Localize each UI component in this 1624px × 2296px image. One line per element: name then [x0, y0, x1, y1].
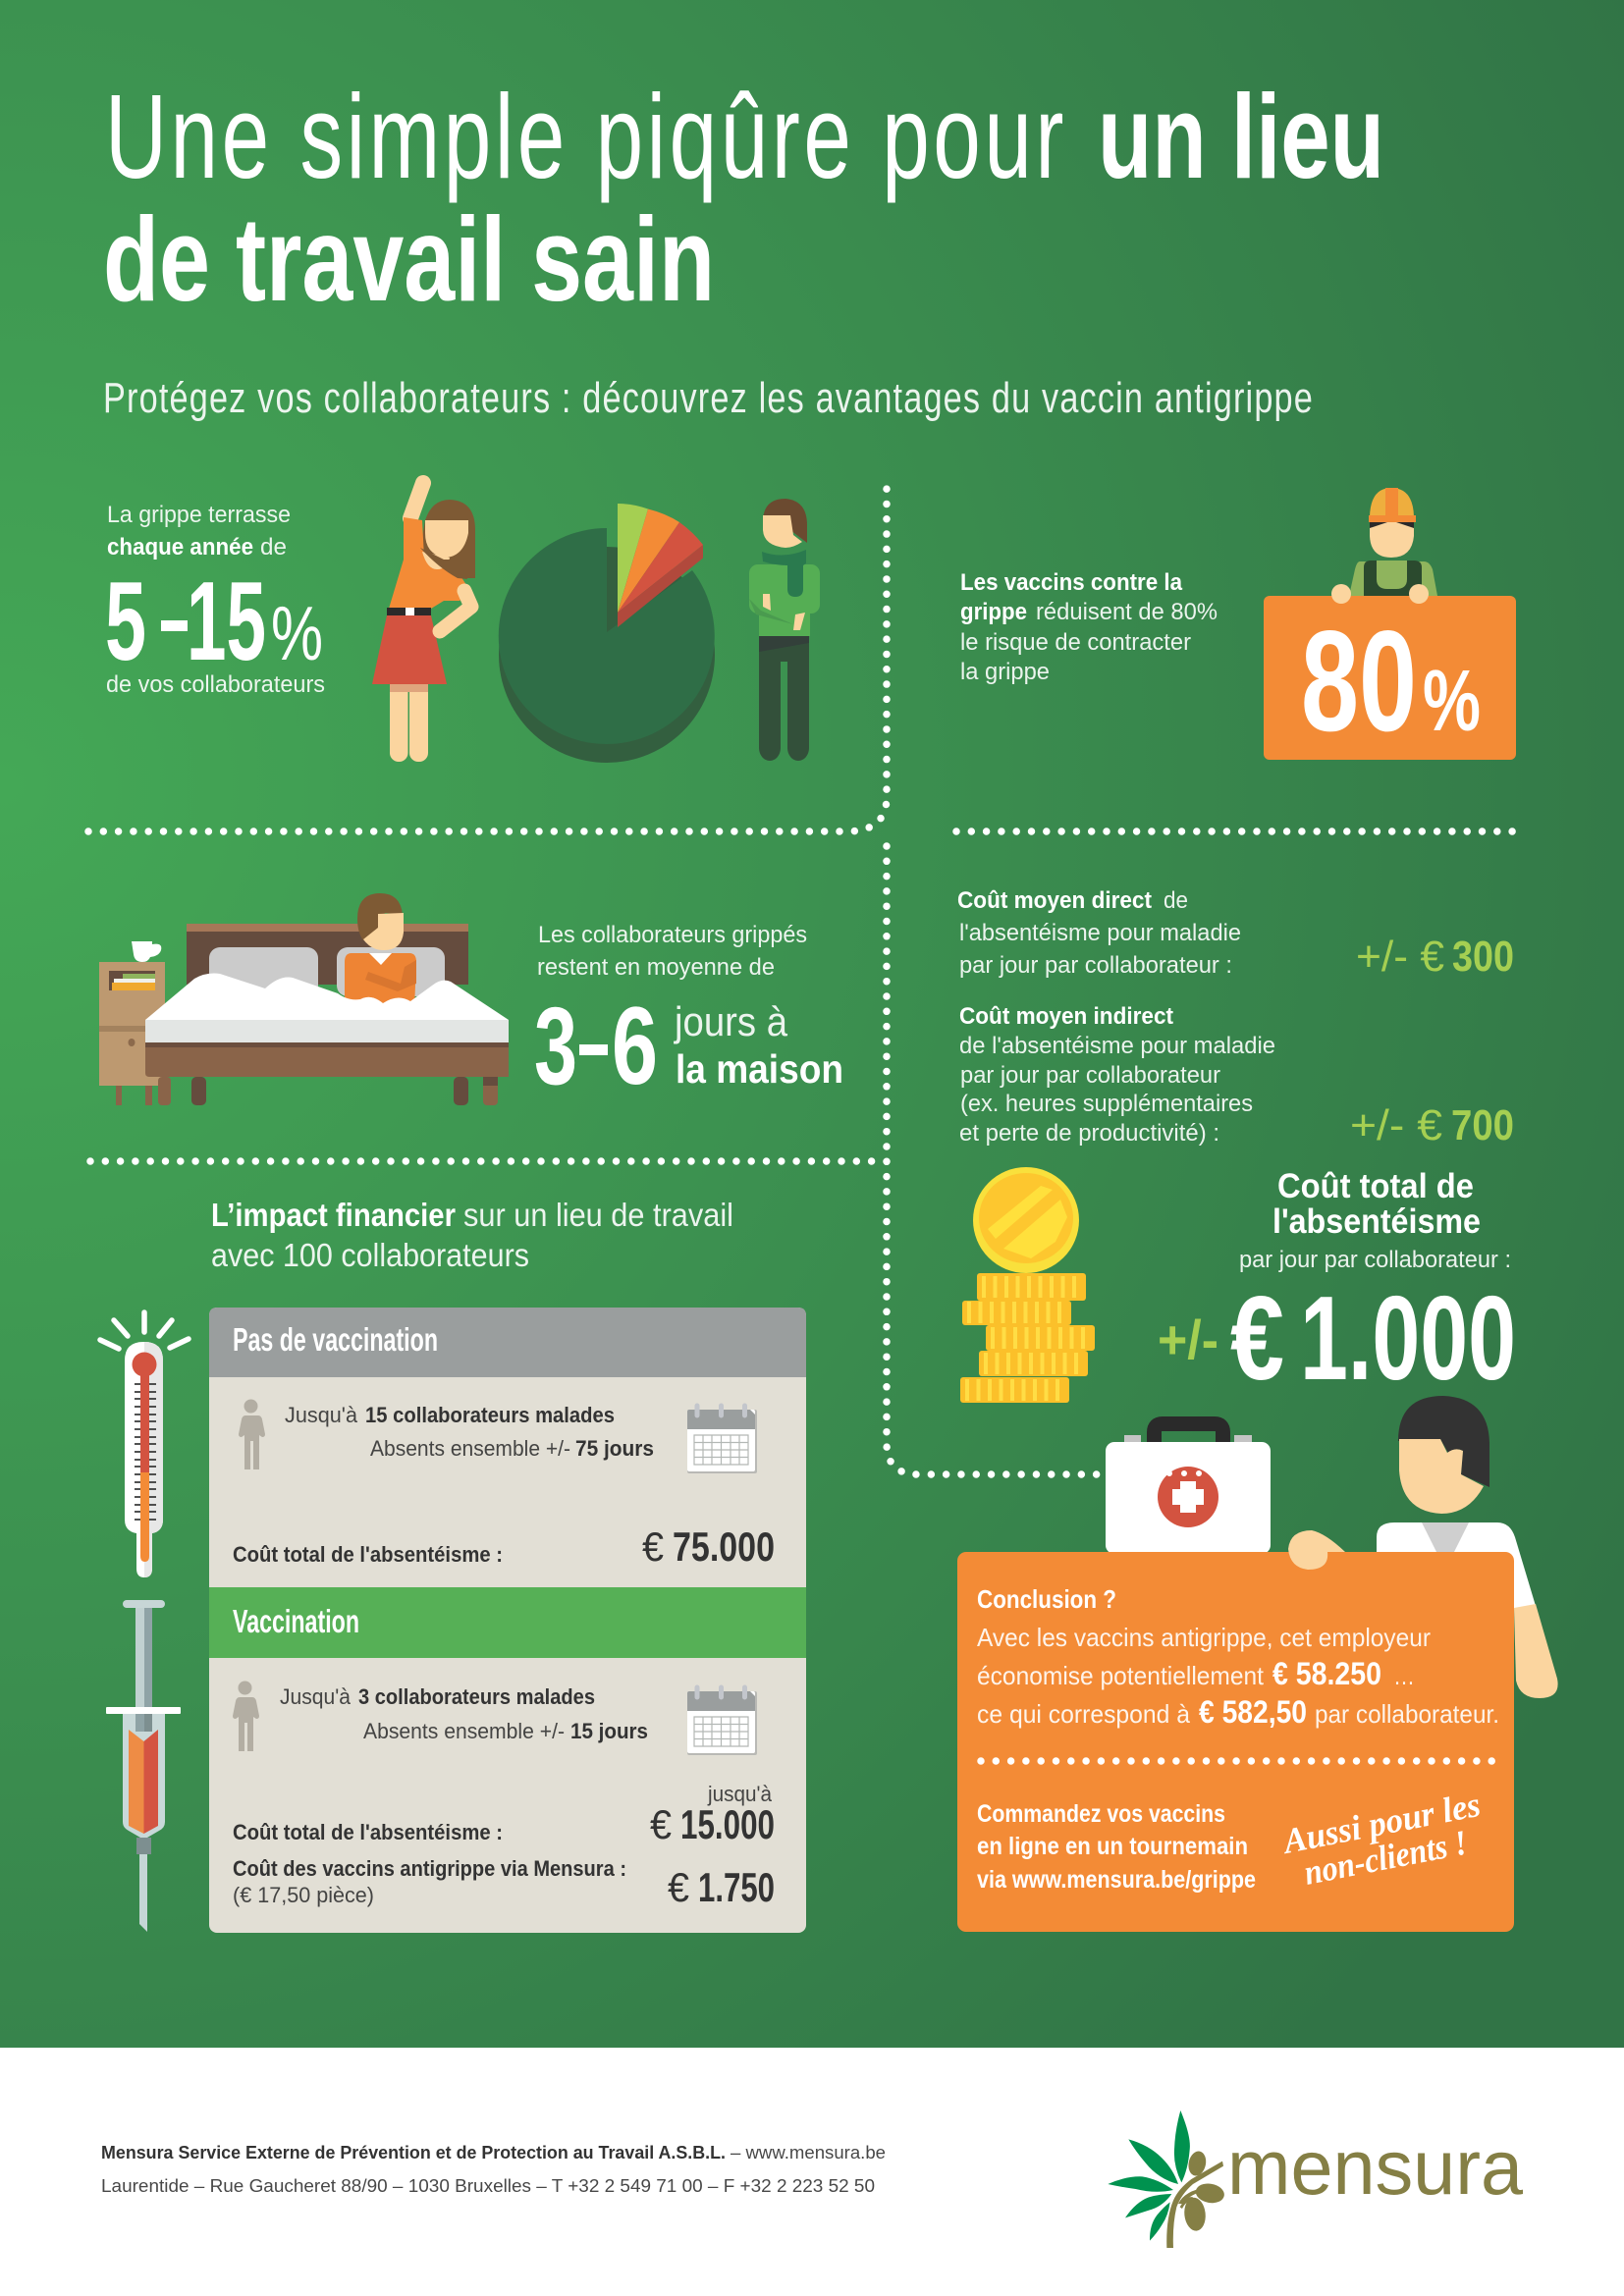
text: vaccination costs [233, 1782, 775, 1910]
text: flu share: 15 [187, 560, 266, 684]
logo: mensura: mensura [1227, 2123, 1523, 2211]
text: flu share: La grippe terrasse [107, 502, 291, 528]
text: total cost: 75.000 [673, 1523, 775, 1570]
text: indirect cost: de l'absentéisme pour maladie [959, 1033, 1275, 1059]
logo: mensura [1108, 2110, 1523, 2248]
text: vaccination costs: € [668, 1864, 689, 1910]
text: indirect cost: Coût moyen indirect [959, 1003, 1173, 1030]
text: indirect cost: +/- € [1350, 1101, 1442, 1149]
text: vaccination costs: (€ 17,50 pièce) [233, 1883, 374, 1907]
text: vaccination details: Jusqu'à [280, 1684, 352, 1709]
text: vaccine effectiveness: grippe [960, 599, 1027, 625]
dotted separators [88, 481, 887, 831]
icon: doctor [1377, 1396, 1558, 1698]
text: indirect cost: et perte de productivité) : [959, 1120, 1219, 1147]
icon: doctor's hand [1288, 1530, 1345, 1570]
text: vaccine effectiveness [960, 569, 1218, 685]
text: order online: Commandez vos vaccins [977, 1800, 1225, 1828]
text: direct cost: de [1164, 887, 1188, 914]
text: conclusion: € 58.250 [1272, 1656, 1381, 1691]
title: Une simple piqûre pour [105, 70, 1067, 203]
text: vaccination costs: 15.000 [680, 1801, 775, 1847]
text: total cost: Coût total de l'absentéisme : [233, 1542, 503, 1567]
text: vaccination details [280, 1684, 648, 1743]
text: total absence cost: 1.000 [1300, 1271, 1516, 1405]
text: no vaccination details: Absents ensemble +/- [370, 1436, 570, 1461]
text: flu share: % [271, 590, 323, 676]
text: conclusion [977, 1584, 1499, 1730]
text: flu share: chaque année [107, 534, 253, 561]
text: flu share [105, 502, 325, 698]
icon: man with scarf [749, 499, 820, 761]
text: legal address: Mensura Service Externe de Prévention et de Protection au Travail A.S.B.L. [101, 2143, 726, 2163]
text: total absence cost: € [1230, 1271, 1284, 1405]
text: conclusion: … [1393, 1661, 1415, 1690]
subtitle: Protégez vos collaborateurs : découvrez les avantages du vaccin antigrippe [103, 374, 1314, 422]
text: direct cost: +/- € [1356, 933, 1444, 981]
pie chart [499, 504, 715, 763]
footer [0, 2048, 1624, 2296]
icon: first aid kit [1106, 1423, 1271, 1554]
text: direct cost [957, 887, 1514, 981]
text: total absence cost: par jour par collaborateur : [1239, 1247, 1511, 1273]
text: indirect cost: 700 [1451, 1101, 1514, 1149]
text: days at home: 6 [612, 985, 658, 1107]
text: direct cost: Coût moyen direct [957, 887, 1152, 914]
panel: 80% sign: % [1423, 652, 1481, 749]
text: conclusion: ce qui correspond à [977, 1699, 1191, 1729]
text: total absence cost: +/- [1158, 1308, 1218, 1370]
text: order online [977, 1800, 1256, 1894]
text: vaccine effectiveness: le risque de contracter [960, 629, 1191, 656]
text: total absence cost: l'absentéisme [1272, 1202, 1481, 1241]
header: vaccination [209, 1587, 806, 1658]
text: flu share: de [260, 534, 287, 561]
text: vaccination details: 15 jours [570, 1719, 648, 1743]
icon: worker [1349, 488, 1437, 596]
text: flu share: de vos collaborateurs [106, 671, 325, 698]
text: vaccination costs: € [650, 1801, 672, 1847]
icon: person [239, 1400, 265, 1469]
icon: calendar [687, 1406, 757, 1473]
title [103, 70, 1384, 326]
text: vaccine effectiveness: réduisent de 80% [1036, 599, 1218, 625]
text: no vaccination details [285, 1403, 654, 1461]
text: direct cost: par jour par collaborateur : [959, 952, 1232, 979]
text: days at home: Les collaborateurs grippés [538, 922, 807, 948]
text: vaccination costs: Coût des vaccins antigrippe via Mensura : [233, 1856, 626, 1881]
icon: thermometer [100, 1312, 189, 1577]
text: total cost: € [642, 1523, 664, 1570]
text: indirect cost: par jour par collaborateur [960, 1062, 1220, 1089]
panel: 80% sign [1264, 584, 1516, 761]
text: also for non-clients: Aussi pour les [1278, 1785, 1484, 1861]
text: conclusion: € 582,50 [1199, 1694, 1307, 1730]
text: conclusion: par collaborateur. [1315, 1699, 1499, 1729]
text: legal address: – www.mensura.be [731, 2143, 886, 2163]
icon: coins [960, 1167, 1095, 1403]
icon: woman [372, 483, 475, 762]
icon: bed with sick person [99, 893, 509, 1105]
text: days at home: restent en moyenne de [537, 954, 775, 981]
heading: financial impact: avec 100 collaborateurs [211, 1237, 529, 1273]
text: vaccination details: Absents ensemble +/- [363, 1719, 565, 1743]
text: vaccination costs: jusqu'à [707, 1782, 773, 1806]
text: direct cost: l'absentéisme pour maladie [959, 920, 1241, 946]
text: conclusion: économise potentiellement [977, 1661, 1265, 1690]
text: direct cost: 300 [1452, 933, 1514, 981]
heading: financial impact: L’impact financier [211, 1197, 456, 1233]
text: also for non-clients: non-clients ! [1301, 1823, 1470, 1893]
title: de travail sain [103, 192, 715, 326]
text: total absence cost [1158, 1167, 1516, 1405]
text: no vaccination details: 75 jours [575, 1436, 654, 1461]
header: no vaccination: Pas de vaccination [233, 1321, 438, 1358]
text: total absence cost: Coût total de [1277, 1167, 1474, 1205]
panel: conclusion [957, 1530, 1514, 1932]
text: no vaccination details: 15 collaborateurs malades [365, 1403, 615, 1427]
text: days at home: la maison [676, 1046, 843, 1092]
text: days at home: jours à [673, 998, 788, 1044]
text: vaccine effectiveness: la grippe [960, 659, 1050, 685]
text: vaccination costs: 1.750 [698, 1864, 775, 1910]
text: legal address [101, 2143, 886, 2196]
header: no vaccination [209, 1308, 806, 1377]
header: vaccination: Vaccination [233, 1603, 359, 1639]
text: legal address: Laurentide – Rue Gaucheret 88/90 – 1030 Bruxelles – T +32 2 549 71 00 – F +32 2 223 52 50 [101, 2176, 875, 2196]
text: days at home: 3 [534, 985, 577, 1107]
icon: person [233, 1681, 259, 1751]
text: vaccine effectiveness: Les vaccins contre la [960, 569, 1183, 596]
text: days at home [534, 922, 843, 1107]
icon: calendar [687, 1687, 757, 1755]
text: conclusion: Conclusion ? [977, 1584, 1116, 1614]
text: indirect cost [959, 1003, 1514, 1149]
text: vaccination costs: Coût total de l'absentéisme : [233, 1820, 503, 1844]
heading: financial impact: sur un lieu de travail [463, 1197, 733, 1233]
text: also for non-clients [1278, 1785, 1484, 1893]
text: conclusion: Avec les vaccins antigrippe, cet employeur [977, 1623, 1431, 1652]
panel: 80% sign: 80 [1301, 601, 1417, 761]
text: order online: en ligne en un tournemain [977, 1833, 1248, 1860]
icon: syringe [106, 1600, 181, 1932]
text: order online: via www.mensura.be/grippe [977, 1866, 1256, 1894]
text: vaccination details: 3 collaborateurs malades [358, 1684, 595, 1709]
panel: cost table [209, 1308, 806, 1933]
text: flu share: 5 [105, 560, 146, 684]
heading: financial impact [211, 1197, 733, 1273]
text: indirect cost: (ex. heures supplémentaires [960, 1091, 1253, 1117]
text: total cost [233, 1523, 775, 1570]
title: un lieu [1098, 70, 1384, 203]
text: no vaccination details: Jusqu'à [285, 1403, 358, 1427]
